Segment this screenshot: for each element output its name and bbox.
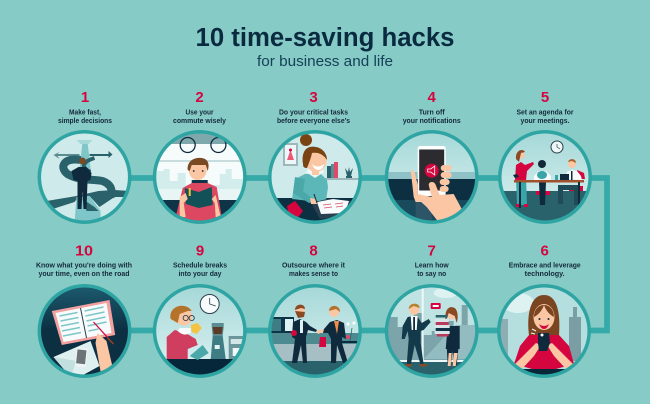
step 3 [269,89,361,224]
step 9 [154,242,247,378]
number 4: 4 [428,89,437,106]
label 10 [36,260,132,278]
label 3: Do your critical tasks [279,108,348,116]
number 2: 2 [195,89,204,106]
label 4 [403,108,461,125]
label 9: into your day [178,269,222,278]
icon: man at crossroads [39,132,130,223]
label 7: Learn how [415,260,449,270]
number 1: 1 [81,89,89,106]
label 10: Know what you're doing with [36,260,132,270]
label 8 [282,260,346,278]
number 6: 6 [541,242,549,260]
label 8: Outsource where it [282,260,346,270]
step 8 [269,242,361,378]
number 3: 3 [309,89,318,106]
label 8: makes sense to [289,269,339,278]
number 8: 8 [309,242,318,260]
label 2: commute wisely [173,116,226,125]
number 5: 5 [541,89,549,106]
icon: woman using smartphone [498,286,590,378]
icon: planner notebook and phone [39,286,130,377]
step 4 [386,89,478,226]
label 6: technology. [525,269,565,278]
label 5: your meetings. [520,116,570,125]
icon: coffee break [154,286,247,378]
connector path [85,178,607,330]
label 2 [173,108,226,125]
label 1 [58,108,112,125]
label 3: before everyone else's [277,116,350,125]
label 10: your time, even on the road [38,269,130,278]
label 1: Make fast, [69,108,101,116]
label 3 [277,108,350,125]
step 5 [499,89,591,224]
icon: hand holding phone [386,132,478,226]
icon: business handshake [269,286,361,378]
step 6 [498,242,590,378]
icon: man reading on train [154,131,246,224]
icon: team meeting [499,132,591,224]
label 5 [516,108,574,125]
label 6: Embrace and leverage [509,260,581,270]
step 7 [386,242,478,378]
label 9: Schedule breaks [173,260,227,270]
label 9 [173,260,227,278]
icon: man and woman with stack of books [386,286,478,378]
step 2 [154,89,246,224]
label 5: Set an agenda for [516,108,574,116]
title: 10 time-saving hacks [196,24,454,52]
label 1: simple decisions [58,116,112,125]
icon: woman writing at desk [269,132,361,224]
label 7 [415,260,449,278]
label 7: to say no [417,269,447,278]
label 6 [509,260,581,278]
subtitle: for business and life [257,53,393,70]
label 4: Turn off [419,108,445,116]
step 1 [39,89,130,223]
label 4: your notifications [403,116,461,125]
number 10: 10 [75,242,93,260]
label 2: Use your [186,108,214,116]
step 10 [36,242,132,377]
number 7: 7 [428,242,436,260]
number 9: 9 [196,242,204,260]
